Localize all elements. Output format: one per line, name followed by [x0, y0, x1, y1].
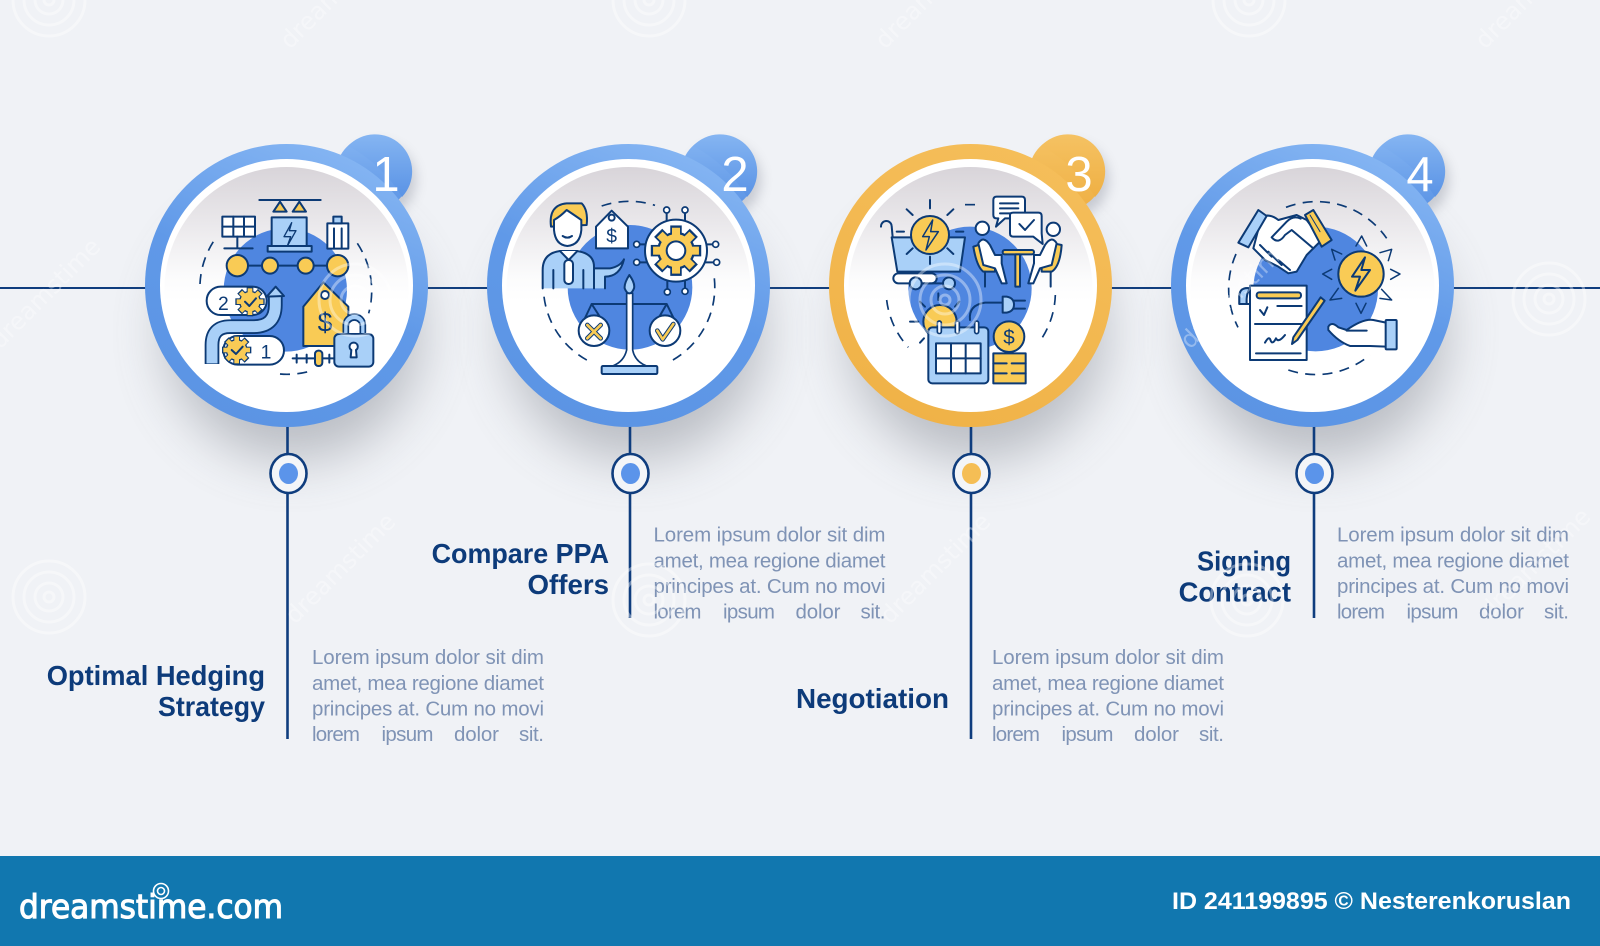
text block 4: principes at. Cum no movi: [1337, 575, 1569, 598]
connector 3: [954, 425, 990, 739]
badge 4: [1369, 136, 1449, 217]
circle 2 shadow: [507, 204, 763, 460]
badge overlap 2: [693, 134, 757, 197]
icon: negotiation: [881, 197, 1062, 383]
text block 1: dolor: [454, 723, 499, 746]
text block 2: amet, mea regione diamet: [654, 550, 886, 572]
ring 1: [145, 144, 428, 427]
number 2: 2: [721, 148, 749, 202]
badge overlap 1: [348, 134, 412, 197]
badge overlap 4: [1381, 134, 1445, 197]
title 2: [432, 538, 609, 600]
watermarks: dreamstime: [279, 508, 401, 629]
text block 4: [1337, 524, 1569, 624]
number 3: 3: [1065, 148, 1093, 202]
circle 3 shadow: [849, 204, 1105, 460]
text block 1: lorem: [312, 723, 360, 746]
circle 4 shadow: [1191, 204, 1447, 460]
text block 4: lorem: [1337, 600, 1385, 624]
text block 1: sit.: [519, 723, 544, 746]
watermarks: [0, 0, 1596, 636]
icon: energy hedging: 1: [261, 342, 271, 363]
text block 1: Lorem ipsum dolor sit dim: [312, 646, 544, 669]
number 4: 4: [1406, 148, 1434, 202]
text block 4: Lorem ipsum dolor sit dim: [1337, 524, 1569, 546]
icon: signing contract: [1229, 202, 1400, 375]
text block 3: lorem: [992, 723, 1040, 746]
icon: compare offers: [543, 201, 720, 374]
watermarks: dreamstime: [874, 508, 996, 629]
connector 1: [270, 425, 306, 739]
logo swirl: [154, 884, 168, 898]
text block 4: ipsum: [1406, 600, 1458, 624]
text block 3: ipsum: [1062, 723, 1114, 746]
text block 2: ipsum: [723, 600, 775, 624]
text block 4: amet, mea regione diamet: [1337, 550, 1569, 572]
ring 3: [829, 144, 1112, 427]
title 2: Compare PPA: [432, 538, 609, 569]
title 4: Signing: [1197, 546, 1291, 576]
watermarks: dreamstime: [1174, 233, 1296, 354]
badge 1: [336, 136, 416, 217]
text block 3: amet, mea regione diamet: [992, 672, 1224, 695]
step 1: [47, 134, 544, 746]
connector 2: [612, 425, 648, 618]
text block 1: [312, 646, 544, 746]
text block 1: principes at. Cum no movi: [312, 698, 544, 720]
text block 2: Lorem ipsum dolor sit dim: [654, 524, 886, 546]
footer bar: [0, 856, 1600, 946]
badge 3: [1029, 136, 1109, 217]
text block 2: sit.: [860, 600, 886, 624]
connector 4: [1296, 425, 1332, 618]
text block 4: sit.: [1544, 600, 1569, 624]
badge overlap 3: [1041, 134, 1105, 197]
text block 1: amet, mea regione diamet: [312, 672, 544, 695]
text block 2: [654, 524, 886, 624]
icon: energy hedging: $: [318, 308, 333, 338]
text block 3: principes at. Cum no movi: [992, 698, 1224, 720]
ring 4: [1171, 144, 1454, 427]
number 1: 1: [372, 148, 400, 202]
text block 3: sit.: [1199, 723, 1224, 746]
title 1: Strategy: [158, 691, 266, 722]
circle 1 shadow: [165, 204, 421, 460]
icon: energy hedging: [200, 200, 373, 374]
icon: negotiation: $: [1003, 326, 1015, 349]
logo text: dreamstime.com: [19, 887, 283, 926]
title 2: Offers: [528, 569, 609, 600]
image id credit: ID 241199895 © Nesterenkoruslan: [1172, 888, 1571, 915]
badge 2: [681, 136, 761, 217]
text block 3: Lorem ipsum dolor sit dim: [992, 646, 1224, 669]
horizontal timeline line: [0, 287, 1600, 289]
text block 1: ipsum: [382, 723, 434, 746]
step 3: [796, 134, 1224, 746]
text block 3: dolor: [1134, 723, 1179, 746]
ring 2: [487, 144, 770, 427]
step 4: [1171, 134, 1569, 624]
icon: compare offers: $: [606, 226, 617, 247]
title 1: [47, 660, 266, 722]
title 4: [1179, 546, 1291, 608]
text block 3: [992, 646, 1224, 746]
text block 2: principes at. Cum no movi: [654, 575, 886, 598]
watermarks: dreamstime: [1474, 503, 1596, 624]
text block 2: dolor: [796, 600, 841, 624]
step 2: [432, 134, 886, 624]
title 3: Negotiation: [796, 683, 949, 714]
title 1: Optimal Hedging: [47, 660, 265, 691]
text block 4: dolor: [1479, 600, 1524, 624]
text block 2: lorem: [654, 600, 702, 624]
title 4: Contract: [1179, 576, 1291, 608]
icon: energy hedging: 2: [218, 294, 229, 315]
